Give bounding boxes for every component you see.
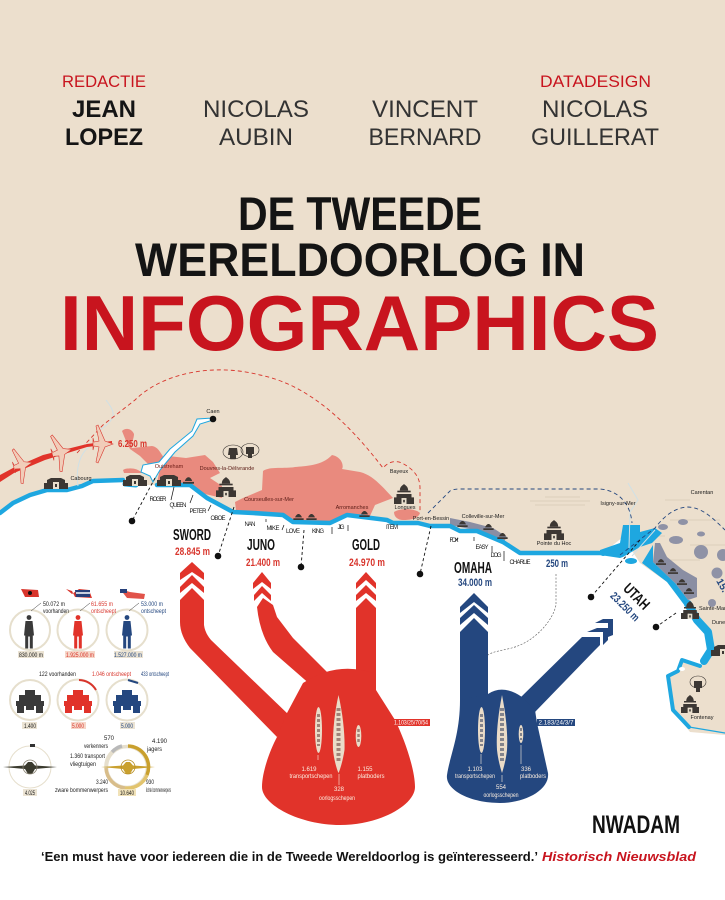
author Jean Lopez: JEAN [72,96,136,123]
fleet ships red [315,695,361,773]
label strip red: 1.103/25/70/54 [394,720,429,726]
beach sectors: FOX [450,538,458,544]
fleet labels blue: 336 [521,767,532,773]
author Vincent Bernard [368,96,482,151]
place names: Carentan [691,490,713,496]
marsh texture [658,519,725,607]
tank labels: 122 voorhanden [39,672,76,678]
fleet labels red: 1.155 [357,767,373,773]
beach name: Sword: SWORD [173,527,211,544]
red fleet blob [262,669,415,825]
author Nicolas Guillerat [531,96,659,151]
plane labels: 570 [104,736,115,742]
beach sectors: QUEEN [170,503,186,509]
beach name: Gold [349,537,385,569]
soldiers [24,615,34,648]
grey zones [450,518,507,543]
place names: Caen [206,409,220,415]
planes [3,760,57,774]
plane labels: 10.640 [120,791,134,797]
plane labels: 930 [146,780,155,786]
troops labels: 61.655 m [91,602,113,608]
fleet ships blue [478,695,523,773]
beach sectors [150,497,530,566]
troops labels: 53.000 m [141,602,163,608]
tank ring charts [10,680,148,720]
place names: Longues [394,505,416,511]
fleet labels red: oorlogsschepen [319,796,355,802]
beach sectors: CHARLIE [510,560,530,566]
text: lichte bommenwerpers [146,788,171,794]
author Nicolas Guillerat: GUILLERAT [531,124,659,151]
place names: Colleville-sur-Mer [462,514,505,520]
beach name: Omaha [454,560,492,589]
tank labels: 1.046 ontscheept [92,672,131,678]
beach name: Utah [608,577,654,624]
plane labels: 4.025 [25,791,35,797]
place names: Cabourg [70,476,92,482]
tank labels: 5.000 [121,724,134,730]
map [0,370,725,900]
red dashed flight route [77,370,420,513]
beach name: Utah: UTAH [620,580,653,613]
beach name: Omaha: 34.000 m [458,577,492,589]
British and Canadian assault arrows [180,562,430,825]
troops labels: 1.527.000 m [114,653,142,659]
quote: ‘Een must have voor iedereen die in de Tweede Wereldoorlog is geïnteresseerd.’ [41,850,538,864]
beach name: Sword [173,527,211,558]
fleet labels red: 1.619 [301,767,317,773]
panel: force statistics [3,589,171,797]
fleet labels blue: 554 [496,785,507,791]
Orne river [141,418,213,482]
place names: Bayeux [390,469,408,475]
author Nicolas Aubin: AUBIN [219,124,293,151]
beach name: Utah: 23.250 m [608,590,642,624]
troops labels: ontscheept [91,609,116,615]
troops labels: ontscheept [141,609,166,615]
tank labels: 1.400 [24,724,37,730]
title [60,187,659,367]
beach sectors: ITEM [386,525,398,531]
beach name: Gold: 24.970 m [349,557,385,569]
beach sectors: JIG [338,525,345,531]
fleet labels blue: transportschepen [455,774,495,780]
author Vincent Bernard: BERNARD [368,124,482,151]
plane labels: vliegtuigen [70,762,96,768]
plane labels: 3.240 [96,780,109,786]
airborne distance: 6.250 m [118,439,147,450]
distance Pointe du Hoc: 250 m [546,558,568,570]
plane labels [23,736,171,797]
data design label: DATADESIGN [540,72,651,91]
author Nicolas Aubin: NICOLAS [203,96,309,123]
US assault arrows [447,593,613,803]
credits [62,72,659,151]
beach sectors: ROGER [150,497,167,503]
author Jean Lopez: LOPEZ [65,124,143,151]
place names: Isigny-sur-Mer [600,501,636,507]
plane labels: zware bommenwerpers [55,788,108,794]
beach sectors: KING [312,529,324,535]
beach sectors: OBOE [210,516,226,522]
beach name: Juno [246,537,280,569]
title: WERELDOORLOG IN [135,233,585,286]
planes and red band [0,425,113,485]
beach name: Sword: 28.845 m [175,546,210,558]
troops labels: 830.000 m [19,653,43,659]
Vire light river [77,400,655,556]
fleet labels red [290,755,384,802]
quote: Historisch Nieuwsblad [542,850,696,864]
pink zone: Sword and Juno [122,429,164,464]
Utah arrow [520,619,613,712]
beach sectors: PETER [190,509,207,515]
place names: Douvres-la-Délivrande [200,466,254,472]
place names: Pointe du Hoc [537,541,572,547]
troops labels: voorhanden [43,609,69,615]
blue dashed flight route [428,489,725,555]
land hatching [530,497,725,560]
troops labels: 1.925.000 m [66,653,94,659]
place names: Port-en-Bessin [413,516,449,522]
battery icons [223,444,706,692]
plane labels: 4.190 [152,739,168,745]
plane labels: verkenners [84,744,108,750]
fleet labels red: platboders [358,774,384,780]
place names: Courseulles-sur-Mer [244,497,294,503]
fleet labels blue: 1.103 [467,767,483,773]
plane labels: 1.360 transport [70,754,105,760]
editors label: REDACTIE [62,72,146,91]
Gold arrow [356,572,376,700]
Utah inlet [600,525,662,558]
title: INFOGRAPHICS [60,279,659,367]
fleet labels blue [455,745,546,799]
tank labels: 5.000 [72,724,85,730]
grey dashed to Omaha arm [488,574,556,655]
beach name: Gold: GOLD [352,537,380,554]
tanks [16,690,44,713]
beach sector ticks [171,487,504,561]
plane rings [9,746,51,788]
Sword arrow [180,562,290,737]
plane labels: jagers [146,747,162,753]
forts [44,444,725,713]
blue fleet blob [447,690,548,803]
beach name: Omaha: OMAHA [454,560,492,577]
sea [0,480,725,900]
troops ring charts [10,610,148,650]
title: DE TWEEDE [238,187,482,240]
Juno arrow [253,572,330,686]
flags [21,589,145,599]
fleet labels red: transportschepen [290,774,332,780]
place names [70,409,725,721]
beach sectors: NAN [244,522,256,528]
publisher logo: NWADAM [592,811,680,839]
coastline [0,480,725,733]
beach sectors: LOVE [286,529,300,535]
author Nicolas Aubin [203,96,309,151]
author Jean Lopez [65,96,143,151]
beach sectors: EASY [476,545,488,551]
troops labels [18,602,166,659]
place names: Fontenay [691,715,714,721]
place names: Ouistreham [155,464,184,470]
fleet labels blue: oorlogsschepen [484,793,518,799]
troops labels: 50.072 m [43,602,65,608]
dots with leader lines [129,416,676,630]
beach name: Juno: JUNO [247,537,275,554]
tank labels [22,672,169,730]
author Nicolas Guillerat: NICOLAS [542,96,648,123]
beach sectors: MIKE [266,526,280,532]
beach sectors: DOG [490,553,502,559]
fleet labels red: 328 [334,787,345,793]
label strip blue: 2.183/24/3/7 [538,720,574,726]
tank labels: 433 ontscheept [141,672,169,678]
author Vincent Bernard: VINCENT [372,96,478,123]
place names: Arromanches [336,505,369,511]
beach name: Juno: 21.400 m [246,557,280,569]
Omaha arrow [460,593,488,720]
fleet labels blue: platboders [520,774,546,780]
